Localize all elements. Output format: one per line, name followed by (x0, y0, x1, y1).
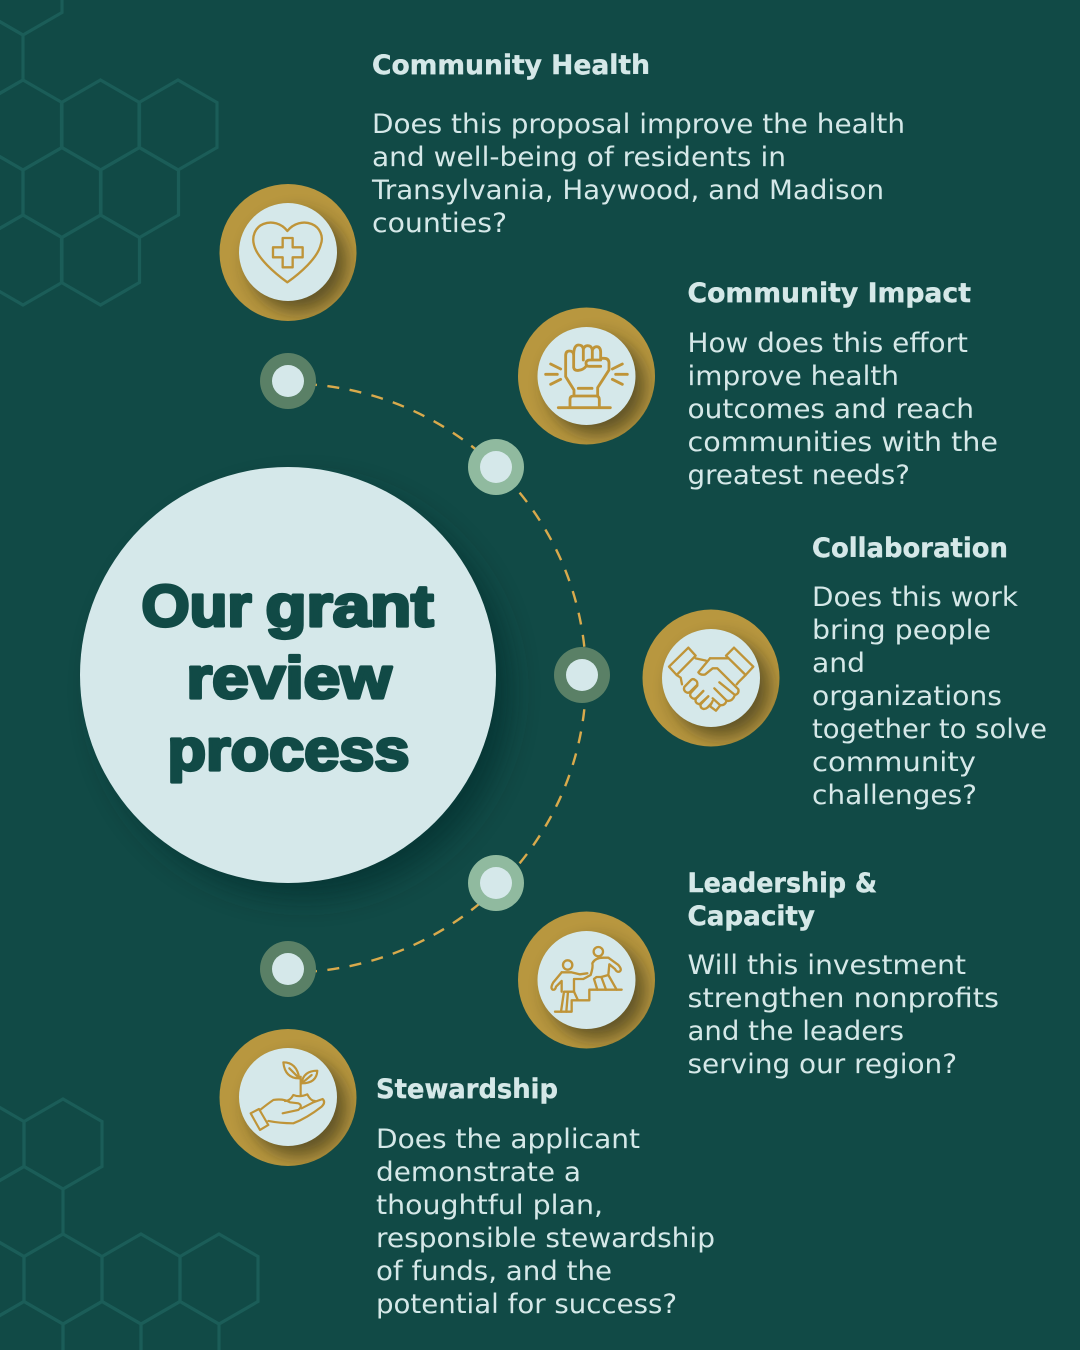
icon: hand holding sprout (220, 1029, 356, 1166)
title: Our (142, 574, 252, 639)
honeycomb pattern: bottom left (0, 1099, 258, 1350)
text: Leadership & Capacity description: strengthen nonprofits (688, 983, 999, 1014)
text: Collaboration description: together to solve (812, 714, 1047, 745)
text: Community Impact description (688, 328, 998, 491)
heading: Community Impact: Community Impact (688, 278, 971, 309)
timeline node 4 (468, 855, 524, 911)
text: Community Impact description: How does this effort (688, 328, 968, 359)
title (142, 574, 434, 783)
text: Community Impact description: greatest needs? (688, 460, 910, 491)
text: Community Health description (371, 109, 905, 239)
text: Collaboration description: community (812, 747, 976, 778)
heading: Collaboration: Collaboration (812, 533, 1008, 564)
text: Stewardship description: demonstrate a (376, 1157, 581, 1188)
central circle with title (80, 467, 510, 897)
text: Leadership & Capacity description: serving our region? (688, 1049, 957, 1080)
honeycomb pattern: top left (0, 0, 217, 305)
text: Community Impact description: communities with the (688, 427, 998, 458)
text: Collaboration description: bring people (812, 615, 991, 646)
heading: Community Health: Community Health (372, 50, 650, 81)
text: Stewardship description: Does the applicant (376, 1124, 640, 1155)
text: Collaboration description: and (812, 648, 865, 679)
text: Community Impact description: improve health (688, 361, 899, 392)
timeline node 3 (554, 647, 610, 703)
dashed arc connecting the nodes (288, 384, 586, 972)
text: Stewardship description: thoughtful plan, (376, 1190, 603, 1221)
timeline node 5 (260, 941, 316, 997)
text: Stewardship description: responsible stewardship (376, 1223, 715, 1254)
text: Community Health description: Does this proposal improve the health (372, 109, 905, 140)
timeline node 2 (468, 439, 524, 495)
title: grant (266, 574, 434, 639)
text: Leadership & Capacity description: Will this investment (688, 950, 966, 981)
icon: heart with cross (220, 184, 356, 321)
text: Collaboration description: challenges? (812, 780, 977, 811)
timeline node 1 (260, 353, 316, 409)
title: review (186, 646, 392, 711)
text: Community Health description: and well-being of residents in (372, 142, 786, 173)
heading: Stewardship: Stewardship (376, 1074, 558, 1105)
text: Collaboration description (812, 582, 1047, 811)
icon: handshake (642, 610, 780, 746)
text: Collaboration description: organizations (812, 681, 1002, 712)
heading: Leadership & Capacity: Leadership & (688, 868, 877, 899)
text: Stewardship description (376, 1124, 715, 1320)
text: Leadership & Capacity description (688, 950, 999, 1080)
text: Community Health description: Transylvania, Haywood, and Madison (371, 175, 884, 206)
icon: raised fist (518, 308, 655, 444)
text: Stewardship description: of funds, and the (376, 1256, 612, 1287)
text: Community Impact description: outcomes and reach (688, 394, 974, 425)
heading: Leadership & Capacity: Capacity (688, 901, 815, 932)
text: Community Health description: counties? (372, 208, 507, 239)
text: Leadership & Capacity description: and the leaders (688, 1016, 904, 1047)
icon: people climbing stairs (518, 912, 655, 1048)
title: process (168, 718, 410, 783)
text: Stewardship description: potential for success? (376, 1289, 677, 1320)
heading: Leadership & Capacity (688, 868, 877, 932)
text: Collaboration description: Does this work (812, 582, 1018, 613)
